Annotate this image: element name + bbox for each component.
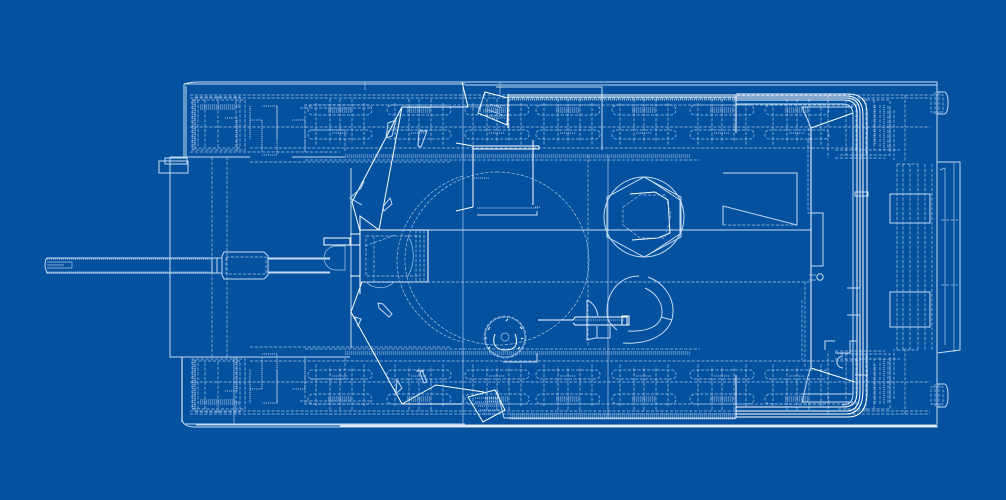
hexagonal hatch (604, 177, 684, 257)
round loader hatch (484, 316, 526, 358)
rear corner brackets (825, 341, 857, 368)
turret dashed ring (360, 172, 810, 345)
rear exhaust pipe bundle (736, 94, 868, 417)
lower side hatch (463, 390, 510, 422)
rear stowage panel (890, 162, 960, 353)
front fender box (159, 158, 188, 173)
turret centre line (428, 229, 811, 231)
gun barrel (45, 252, 330, 279)
rear knobs (931, 92, 948, 407)
open ring hatch (607, 276, 673, 343)
lower armour line (340, 375, 736, 426)
upper top armour line (496, 87, 736, 150)
lower bracket near hatch (503, 353, 537, 362)
rear deck panel (723, 173, 797, 225)
upper side hatch (470, 92, 508, 128)
commander hatch (456, 140, 540, 215)
bottom track assembly (190, 347, 930, 414)
gun mantlet (324, 230, 428, 294)
turret armour outline (350, 82, 484, 404)
top track assembly (190, 95, 930, 162)
hull outline (170, 82, 937, 427)
rear bulkhead and struts (802, 107, 855, 403)
gunner sight (538, 300, 629, 340)
